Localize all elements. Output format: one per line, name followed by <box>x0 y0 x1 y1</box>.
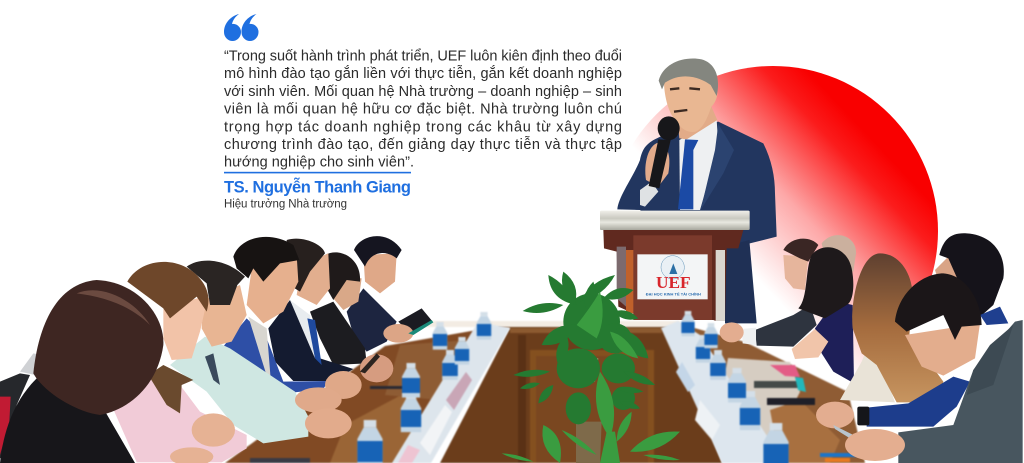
lectern base <box>603 230 743 321</box>
right table top <box>680 324 865 463</box>
attendee 4 <box>222 237 393 399</box>
attendee 1 <box>0 280 163 463</box>
left table <box>225 312 510 463</box>
quote text block: chương trình đào tạo, đến giảng dạy thực tiễn và thực tập <box>224 136 622 153</box>
left name plates <box>420 405 452 455</box>
speaker hand <box>645 143 669 187</box>
speaker face <box>664 72 717 132</box>
speaker tie <box>678 139 698 209</box>
lectern sign <box>637 254 708 299</box>
quote text block: với sinh viên. Mối quan hệ Nhà trường – doanh nghiệp – sinh <box>224 84 622 100</box>
speaker eyes and mouth <box>670 88 700 112</box>
red gradient circle <box>608 66 938 396</box>
back-right attendee <box>935 233 1008 325</box>
attendee 6 <box>310 252 367 365</box>
quote text block: mô hình đào tạo gắn liền với thực tiễn, gắn kết doanh nghiệp <box>224 65 622 82</box>
right table white runner <box>661 321 785 463</box>
attendee 1 chair <box>0 353 42 458</box>
author title: Hiệu trưởng Nhà trường <box>224 198 347 210</box>
hand with watch <box>816 402 869 428</box>
speaker and lectern <box>600 59 777 323</box>
quote mark icon <box>224 14 259 41</box>
lectern front panel <box>633 235 712 320</box>
left water bottles <box>357 312 491 463</box>
long-haired attendee <box>840 253 943 402</box>
lectern left column <box>617 247 626 307</box>
quote text block: trọng hợp tác doanh nghiệp trong các khâu từ xây dựng <box>224 119 622 135</box>
speaker shirt <box>679 119 718 210</box>
blue sleeve arm <box>867 377 970 427</box>
profile attendee <box>720 239 818 347</box>
lectern right column <box>716 250 725 321</box>
black-haired attendee <box>792 247 854 383</box>
quote text block: hướng nghiệp cho sinh viên”. <box>224 155 414 171</box>
speaker suit <box>617 122 777 250</box>
right water bottles <box>681 311 789 463</box>
bald attendee <box>822 235 856 272</box>
quote text block: “Trong suốt hành trình phát triển, UEF luôn kiên định theo đuổi <box>224 48 622 64</box>
quote text block: viên là mối quan hệ hữu cơ đặc biệt. Nhà trường luôn chú <box>224 102 622 118</box>
author rule <box>224 172 411 173</box>
right group of attendees <box>720 233 1023 463</box>
speaker trousers side <box>725 240 757 323</box>
potted plant <box>502 272 680 463</box>
right name plates <box>695 400 720 440</box>
microphone <box>649 116 680 188</box>
lectern top <box>600 211 750 230</box>
attendee 3 <box>170 261 352 443</box>
plant back foliage <box>513 272 655 424</box>
plant front leaves <box>502 292 680 463</box>
center wood wall <box>400 321 722 463</box>
right table <box>661 311 865 463</box>
left table top <box>225 326 500 463</box>
left table white runner <box>392 322 510 463</box>
jacket lapel <box>701 124 734 210</box>
front attendee <box>833 273 1023 463</box>
sign logo <box>661 256 684 279</box>
left phone on table <box>250 458 310 463</box>
attendee 2 <box>110 262 247 463</box>
speaker neck <box>677 103 717 139</box>
sign subtitle: ĐẠI HỌC KINH TẾ TÀI CHÍNH <box>646 292 701 297</box>
quote text block <box>224 48 622 171</box>
top ledge <box>400 321 680 327</box>
wood panel <box>530 350 654 463</box>
shirt cuff <box>640 182 658 207</box>
right table papers <box>754 365 860 462</box>
attendee 7 <box>347 236 433 352</box>
attendee 5 <box>268 239 353 381</box>
plant trunk <box>576 422 602 463</box>
left group of attendees <box>0 236 433 463</box>
speaker hair <box>659 59 718 96</box>
sign wordmark: UEF <box>656 273 691 292</box>
author name: TS. Nguyễn Thanh Giang <box>224 178 411 196</box>
